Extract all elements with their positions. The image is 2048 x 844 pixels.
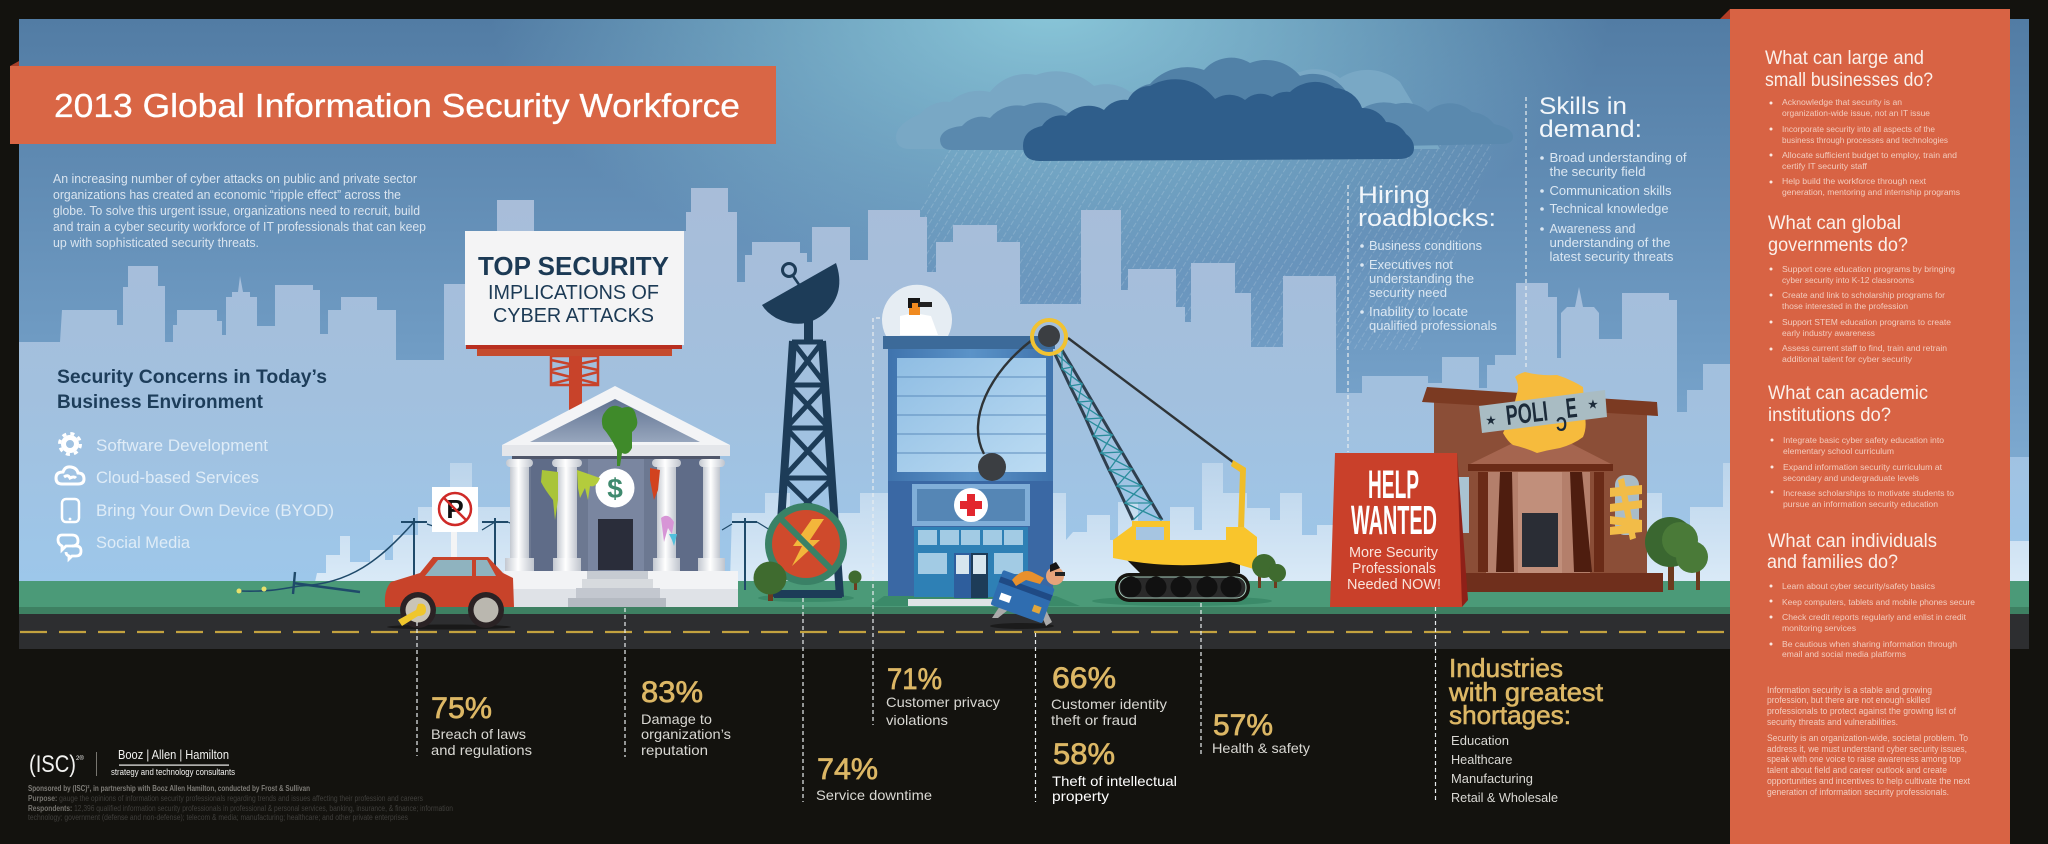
police badge and sign: E	[1564, 392, 1579, 424]
lookout dome with man and binoculars	[882, 285, 952, 336]
stat: 58%	[1052, 738, 1177, 804]
cloud: pale back	[896, 69, 1440, 149]
hiring roadblocks	[1358, 182, 1497, 333]
label: byod: Bring Your Own Device (BYOD)	[96, 502, 334, 520]
section: businesses: generation, mentoring and internship programs	[1782, 187, 1960, 197]
billboard truss	[551, 355, 598, 417]
dashed callout lines	[417, 97, 1526, 803]
section: academic institutions: What can academic	[1768, 383, 1928, 404]
billboard	[465, 231, 684, 417]
stat: 75%: and regulations	[431, 742, 532, 758]
help wanted sign: Needed NOW!	[1347, 577, 1441, 593]
section: academic institutions: elementary school curriculum	[1783, 446, 1894, 456]
intro paragraph: and train a cyber security workforce of IT professionals that can keep	[53, 220, 426, 234]
section: academic institutions	[1768, 383, 1954, 509]
security concerns list	[56, 434, 334, 559]
stat: 71%: Customer privacy	[886, 694, 1000, 710]
industries list: Education	[1451, 734, 1509, 748]
section: businesses	[1765, 48, 1960, 197]
skills list: Awareness and	[1550, 222, 1636, 236]
stat: 58%: 58%	[1053, 738, 1115, 771]
closing paragraphs: opportunities and incentives to help cultivate the next	[1767, 776, 1971, 786]
stat: 74%: Service downtime	[816, 787, 932, 803]
trees right of station	[1645, 517, 1708, 590]
roadblock list: qualified professionals	[1369, 319, 1497, 333]
no lightning sign	[765, 503, 847, 585]
roadblock list: Inability to locate	[1369, 305, 1468, 319]
logo: Booz Allen Hamilton	[111, 747, 235, 778]
stat: 57%	[1212, 709, 1310, 756]
stat: 75%	[431, 692, 532, 758]
station portico	[1468, 443, 1613, 573]
no parking sign: P	[446, 494, 464, 524]
roadblock list: Executives not	[1369, 258, 1454, 272]
logo: ISC2: (ISC)	[29, 751, 76, 778]
police station	[1422, 372, 1663, 592]
section: businesses: small businesses do?	[1765, 70, 1933, 91]
closing paragraphs	[1767, 685, 1971, 797]
stat: 66%: Customer identity	[1051, 696, 1167, 712]
satellite dish	[762, 263, 839, 342]
section: academic institutions: secondary and undergraduate levels	[1783, 473, 1919, 483]
closing paragraphs: Information security is a stable and growing	[1767, 685, 1932, 695]
roadblock list: understanding the	[1369, 272, 1474, 286]
label: cloud: Cloud-based Services	[96, 469, 259, 487]
trees behind crane	[1252, 554, 1286, 588]
closing paragraphs: Security is an organization-wide, societal problem. To	[1767, 733, 1968, 743]
industries with greatest shortages: shortages:	[1449, 700, 1571, 730]
near skyline	[315, 463, 2029, 582]
stat: 74%	[816, 753, 932, 803]
skills list: understanding of the	[1550, 236, 1671, 250]
storm clouds	[896, 58, 1513, 161]
wrecking ball	[978, 453, 1006, 481]
section: individuals and families	[1767, 531, 1975, 659]
skills list: latest security threats	[1550, 250, 1674, 264]
bank building	[502, 386, 738, 607]
section: governments: Support STEM education programs to create	[1782, 317, 1951, 327]
section: individuals and families: What can individuals	[1768, 531, 1937, 552]
label: software: Software Development	[96, 437, 268, 455]
section: businesses: Help build the workforce through next	[1782, 176, 1927, 186]
hospital sign with red cross	[912, 484, 1030, 526]
billboard heading: IMPLICATIONS OF	[488, 282, 659, 304]
skills list: Broad understanding of	[1550, 151, 1687, 165]
hiring roadblocks: roadblocks:	[1358, 205, 1496, 232]
title banner	[10, 61, 776, 144]
cloud: mid back	[1126, 58, 1350, 130]
section: academic institutions: Integrate basic cyber safety education into	[1783, 435, 1944, 445]
section: governments: additional talent for cyber security	[1782, 354, 1913, 364]
section: individuals and families: Check credit reports regularly and enlist in credit	[1782, 612, 1967, 622]
stat: 74%: 74%	[817, 753, 878, 786]
section: governments: Support core education programs by bringing	[1782, 264, 1955, 274]
billboard heading: TOP SECURITY	[478, 251, 669, 281]
section: governments: Create and link to scholarship programs for	[1782, 290, 1945, 300]
icon: mobile device	[62, 499, 79, 522]
billboard heading	[478, 251, 669, 327]
hospital	[870, 285, 1080, 606]
cloud: dark front	[1023, 79, 1414, 161]
sponsor and methodology note	[28, 784, 453, 822]
crane mast	[1231, 460, 1246, 530]
skills in demand: demand:	[1539, 116, 1642, 143]
industries list: Retail & Wholesale	[1451, 791, 1558, 805]
stat: 75%: Breach of laws	[431, 726, 526, 742]
far skyline	[19, 188, 2029, 582]
security concerns heading: Business Environment	[57, 392, 264, 413]
skills list: the security field	[1550, 165, 1646, 179]
rain under storm cloud	[860, 143, 1496, 350]
section: governments: cyber security into K-12 classrooms	[1782, 275, 1914, 285]
crane body	[1113, 521, 1257, 602]
cloud: mid left and right	[940, 102, 1513, 150]
section: businesses: Incorporate security into all aspects of the	[1782, 124, 1935, 134]
stat: 58%: Theft of intellectual	[1052, 773, 1177, 789]
industries list: Manufacturing	[1451, 772, 1533, 786]
intro paragraph: An increasing number of cyber attacks on public and private sector	[53, 172, 417, 186]
crane cables	[978, 338, 1233, 462]
paint splatter	[541, 406, 677, 546]
roadblock list	[1360, 239, 1497, 333]
car with clamp	[385, 557, 514, 630]
icon: gear	[60, 434, 80, 454]
industries with greatest shortages	[1448, 653, 1604, 805]
logo: Booz Allen Hamilton: strategy and technology consultants	[111, 767, 235, 778]
hospital lower windows and doors	[918, 530, 1023, 598]
icon: dollar	[596, 468, 634, 508]
sponsor and methodology note: Purpose: gauge the opinions of information security professionals regarding trends and issues affecting their profession and careers	[28, 794, 423, 803]
closing paragraphs: security threats and vulnerabilities.	[1767, 717, 1898, 727]
skills list: Communication skills	[1550, 184, 1672, 198]
section: individuals and families: monitoring services	[1782, 623, 1856, 633]
billboard heading: CYBER ATTACKS	[493, 305, 654, 327]
section: academic institutions: institutions do?	[1768, 405, 1891, 426]
section: businesses: Allocate sufficient budget to employ, train and	[1782, 150, 1957, 160]
trees near tower	[754, 562, 862, 601]
station windows	[1455, 475, 1642, 540]
grass	[19, 581, 2029, 615]
label: social: Social Media	[96, 534, 191, 552]
section: businesses: organization-wide issue, not an IT issue	[1782, 108, 1930, 118]
closing paragraphs: profession, but there are not enough skilled	[1767, 695, 1930, 705]
stat: 57%: 57%	[1213, 709, 1273, 742]
section: businesses: Acknowledge that security is an	[1782, 97, 1902, 107]
stat: 66%: theft or fraud	[1051, 712, 1137, 728]
section: governments: governments do?	[1768, 235, 1908, 256]
sponsor and methodology note: Respondents: 12,396 qualified information security professionals in professional & personal services, banking, insurance, & finance; information	[28, 804, 453, 813]
section: individuals and families: Learn about cyber security/safety basics	[1782, 581, 1935, 591]
section: academic institutions: Increase scholarships to motivate students to	[1783, 488, 1954, 498]
help wanted sign: More Security	[1349, 545, 1439, 561]
logo: ISC2: 2®	[76, 755, 84, 762]
security concerns heading: Security Concerns in Today’s	[57, 367, 327, 388]
skills in demand	[1539, 93, 1687, 264]
stat: 83%: organization’s	[641, 726, 731, 742]
section: businesses: business through processes and technologies	[1782, 135, 1948, 145]
no parking sign	[432, 487, 478, 560]
stat: 66%: 66%	[1052, 662, 1116, 695]
help wanted sign: Professionals	[1352, 561, 1436, 577]
closing paragraphs: talent about field and career outlook and create	[1767, 765, 1947, 775]
crane boom lattice	[1054, 350, 1162, 520]
section: governments	[1768, 213, 1955, 364]
section: individuals and families: Be cautious when sharing information through	[1782, 639, 1957, 649]
police badge and sign: ★	[1588, 399, 1598, 411]
radio tower	[758, 263, 854, 602]
industries list	[1451, 734, 1558, 805]
closing paragraphs: generation of information security professionals.	[1767, 787, 1949, 797]
help wanted sign: HELP	[1368, 463, 1419, 507]
section: governments: What can global	[1768, 213, 1901, 234]
sponsor and methodology note: technology; government (defense and non-defense); telecom & media; manufacturing; healthcare; and other private enterprises	[28, 813, 408, 822]
industries with greatest shortages: Industries	[1449, 653, 1563, 683]
intro paragraph: organizations has created an economic “ripple effect” across the	[53, 188, 401, 202]
panel: recommendations	[1720, 9, 2010, 844]
icon: dollar: $	[607, 473, 623, 504]
stat: 58%: property	[1052, 788, 1109, 804]
industries list: Healthcare	[1451, 753, 1513, 767]
stat: 83%: reputation	[641, 742, 708, 758]
section: academic institutions: pursue an information security education	[1783, 499, 1938, 509]
crane pulley	[1032, 320, 1066, 354]
section: businesses: certify IT security staff	[1782, 161, 1868, 171]
tower lattice	[776, 341, 840, 597]
intro paragraph: up with sophisticated security threats.	[53, 236, 259, 250]
closing paragraphs: speak with one voice to raise awareness among top	[1767, 754, 1961, 764]
stat: 66%	[1051, 662, 1167, 728]
bank columns	[505, 459, 725, 571]
skills in demand: Skills in	[1539, 93, 1627, 120]
section: individuals and families: Keep computers, tablets and mobile phones secure	[1782, 597, 1975, 607]
section: governments: those interested in the profession	[1782, 301, 1908, 311]
police badge and sign: POLI	[1504, 395, 1549, 431]
police badge and sign: C	[1556, 412, 1567, 434]
title banner: 2013 Global Information Security Workforce	[54, 87, 740, 124]
help wanted sign	[1330, 453, 1468, 607]
closing paragraphs: address it, we must understand cyber security issues,	[1767, 744, 1967, 754]
wrecking crane	[978, 320, 1272, 606]
closing paragraphs: professionals to protect against the growing list of	[1767, 706, 1957, 716]
bank door	[598, 519, 633, 570]
icon: chat bubbles	[58, 535, 81, 559]
stat: 75%: 75%	[431, 692, 492, 725]
stat: 83%: Damage to	[641, 711, 712, 727]
thief with credit card	[990, 562, 1065, 629]
skills list	[1540, 151, 1687, 264]
roadblock list: Business conditions	[1369, 239, 1482, 253]
roadblock list: security need	[1369, 286, 1447, 300]
section: academic institutions: Expand information security curriculum at	[1783, 462, 1943, 472]
police badge and sign: ★	[1486, 415, 1496, 427]
hospital upper windows	[897, 358, 1046, 472]
power lines and fallen pole	[236, 518, 770, 594]
help wanted sign: WANTED	[1351, 497, 1437, 543]
sky background	[19, 19, 2029, 619]
section: governments: early industry awareness	[1782, 328, 1875, 338]
section: governments: Assess current staff to find, train and retrain	[1782, 343, 1947, 353]
stat: 71%: violations	[886, 712, 948, 728]
police badge and sign	[1479, 372, 1607, 453]
wheel clamp	[398, 604, 426, 626]
skills list: Technical knowledge	[1550, 202, 1669, 216]
icon: cloud	[56, 467, 84, 484]
hiring roadblocks: Hiring	[1358, 182, 1430, 209]
section: individuals and families: email and social media platforms	[1782, 649, 1906, 659]
stat: 71%: 71%	[887, 663, 942, 696]
bank plinth and stairs	[504, 571, 738, 607]
section: individuals and families: and families do?	[1767, 552, 1898, 573]
stat: 83%: 83%	[641, 676, 703, 709]
section: businesses: What can large and	[1765, 48, 1924, 69]
sponsor and methodology note: Sponsored by (ISC)², in partnership with Booz Allen Hamilton, conducted by Frost & Sullivan	[28, 784, 310, 793]
intro paragraph: globe. To solve this urgent issue, organizations need to recruit, build	[53, 204, 420, 218]
security concerns heading	[57, 367, 327, 413]
intro paragraph	[53, 172, 426, 250]
industries with greatest shortages: with greatest	[1448, 677, 1604, 707]
logo: Booz Allen Hamilton: Booz | Allen | Hamilton	[118, 747, 229, 762]
logos	[29, 747, 235, 778]
stat: 57%: Health & safety	[1212, 740, 1310, 756]
stat: 83%	[641, 676, 731, 758]
stat: 71%	[886, 663, 1000, 728]
road	[19, 614, 2029, 649]
